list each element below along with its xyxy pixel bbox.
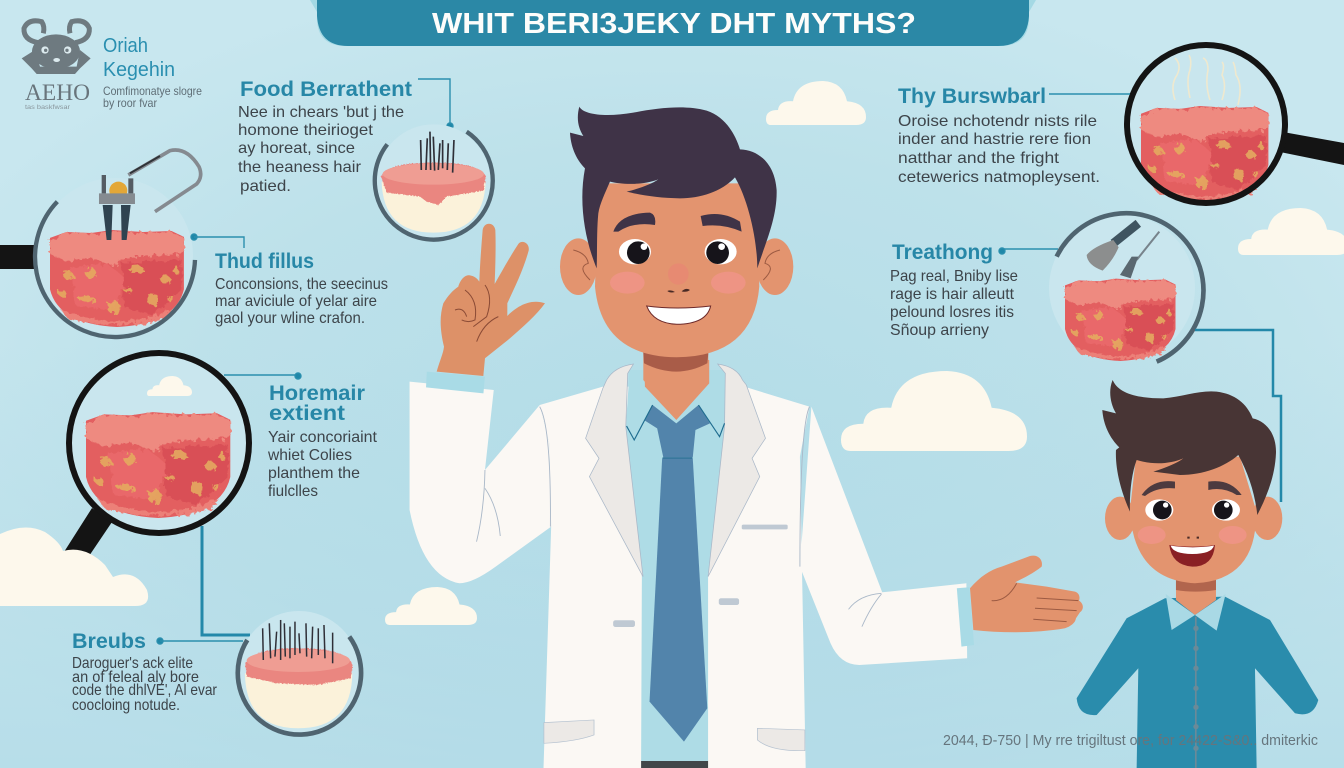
slogan line two: by roor fvar — [103, 96, 157, 110]
footer note: 2044, Ð-750 | My rre trigiltust ore, for 24422-S&0.. dmiterkic — [943, 733, 1318, 749]
body text: planthem the — [268, 465, 360, 482]
title banner — [310, 0, 1036, 46]
tie — [645, 405, 710, 457]
boy character — [1077, 380, 1318, 768]
heading: Thy Burswbarl — [898, 85, 1046, 108]
neck — [643, 350, 708, 418]
lens ring — [1127, 45, 1285, 203]
face — [1130, 457, 1256, 583]
body text — [890, 268, 1018, 339]
body text: Oroise nchotendr nists rile — [898, 113, 1097, 130]
magnifier handle — [64, 508, 112, 562]
panel: thud fillus — [0, 150, 388, 337]
title: WHIT BERI3JEKY DHT MYTHS? — [432, 8, 916, 40]
lapels — [586, 364, 643, 577]
logo small print: tas baskfwsar — [25, 105, 70, 111]
body text: inder and hastrie rere fion — [898, 131, 1091, 148]
body text — [72, 655, 218, 714]
body text: cetewerics natmopleysent. — [898, 169, 1100, 186]
coat and torso — [410, 360, 974, 768]
connector: elbow from lens — [202, 526, 250, 635]
mouth — [1169, 545, 1215, 567]
doctor character — [410, 107, 1083, 768]
logo block — [22, 21, 202, 111]
extended sleeve — [800, 407, 967, 665]
ears — [1105, 497, 1135, 540]
cloud in lens — [147, 376, 192, 396]
heading: Breubs — [72, 630, 146, 653]
heading: Treathong — [892, 241, 993, 264]
body text: rage is hair alleutt — [890, 286, 1015, 303]
body text: coocloing notude. — [72, 697, 180, 714]
scalp illustration — [1141, 106, 1268, 202]
body text: Conconsions, the seecinus — [215, 276, 388, 293]
lens background — [1049, 215, 1195, 361]
connector — [999, 248, 1058, 254]
scalp illustration — [86, 412, 230, 518]
body text: Nee in chears 'but j the — [238, 104, 404, 121]
body text: homone theirioget — [238, 122, 374, 139]
head and raised hand — [437, 107, 793, 418]
extended hand — [970, 556, 1083, 632]
buttons and pocket details — [613, 525, 788, 627]
logo letters: AEHO — [25, 80, 90, 105]
neck V — [644, 360, 709, 420]
coat body — [540, 387, 809, 768]
neck — [1176, 573, 1216, 615]
body text: ay horeat, since — [238, 140, 355, 157]
icon: mouse mascot — [22, 21, 91, 74]
face — [595, 183, 759, 357]
body text: pelound losres itis — [890, 304, 1014, 321]
lens ring — [35, 202, 195, 337]
slogan: Comfimonatye slogre — [103, 84, 202, 98]
body text: code the dhlVE', Al evar — [72, 682, 218, 699]
panel: thy burswbarl — [898, 45, 1344, 203]
magnifier handle — [0, 245, 34, 269]
eyebrows — [613, 213, 742, 232]
shirt — [1077, 597, 1318, 768]
connector — [224, 373, 301, 379]
hair — [1102, 380, 1276, 515]
heading: Thud fillus — [215, 250, 314, 273]
connector — [157, 638, 243, 644]
connector — [1049, 93, 1130, 95]
body text: Daroguer's ack elite — [72, 655, 193, 672]
cloud: centre large — [841, 371, 1027, 451]
panel: horemair extient — [64, 353, 378, 562]
skin cross-section — [238, 611, 361, 735]
body text: mar aviciule of yelar aire — [215, 293, 377, 310]
raised hand — [437, 224, 545, 376]
eyebrows — [1142, 481, 1242, 496]
body text: Pag real, Bniby lise — [890, 268, 1018, 285]
nose — [1187, 537, 1199, 539]
belt — [641, 761, 708, 768]
placket buttons — [1193, 617, 1199, 768]
scalp illustration — [50, 230, 184, 327]
heading — [269, 382, 365, 425]
heading: extient — [269, 402, 345, 425]
lens background — [37, 178, 193, 334]
nose — [668, 263, 689, 285]
panel: food section — [238, 78, 493, 240]
body text: Yair concoriaint — [268, 429, 378, 446]
connector — [418, 79, 453, 129]
ring — [238, 637, 361, 735]
body text: an of feleal aly bore — [72, 669, 199, 686]
body text: fiulclles — [268, 483, 318, 500]
panel: treathong — [890, 213, 1281, 502]
body text — [898, 113, 1100, 186]
steam lines — [1173, 55, 1240, 105]
brand name: Oriah — [103, 35, 148, 57]
hair — [570, 107, 777, 268]
lens background — [71, 355, 247, 531]
mouth — [647, 306, 711, 324]
body text: whiet Colies — [267, 447, 352, 464]
skin cross-section — [375, 124, 493, 240]
heading: Food Berrathent — [240, 78, 412, 101]
cloud: top centre — [766, 81, 866, 125]
lens background — [1128, 46, 1284, 202]
magnifier handle — [1280, 132, 1344, 165]
heading: Horemair — [269, 382, 365, 405]
eyes — [1145, 499, 1173, 521]
collar — [1166, 594, 1195, 630]
body text — [267, 429, 378, 500]
scalp illustration — [1065, 279, 1176, 361]
coat seams — [477, 407, 881, 627]
cloud: bottom left — [0, 527, 148, 606]
icon: tweezers tool — [99, 150, 201, 240]
body text: the heaness hair — [238, 159, 362, 176]
body text: gaol your wline crafon. — [215, 310, 365, 327]
connector — [191, 234, 244, 248]
cheeks — [1138, 526, 1166, 544]
body text — [215, 276, 388, 327]
ears — [560, 238, 597, 295]
icon: tools — [1087, 223, 1159, 278]
cloud: right — [1238, 208, 1344, 255]
panel: breubs — [72, 526, 361, 735]
body text: patied. — [240, 178, 291, 195]
brand name line two: Kegehin — [103, 59, 175, 81]
lens ring — [1057, 213, 1203, 362]
shirt — [626, 370, 725, 762]
lens ring — [69, 353, 249, 533]
body text: Sñoup arrieny — [890, 322, 989, 339]
cheeks — [610, 272, 645, 294]
ring — [375, 132, 493, 240]
elbow connector to boy — [1195, 330, 1281, 502]
ear lines — [573, 250, 780, 280]
eyes — [619, 239, 651, 264]
cloud: lower centre — [385, 587, 477, 625]
body text — [238, 104, 404, 195]
cuffs — [426, 372, 485, 393]
body text: natthar and the fright — [898, 150, 1060, 167]
raised sleeve — [410, 382, 551, 583]
